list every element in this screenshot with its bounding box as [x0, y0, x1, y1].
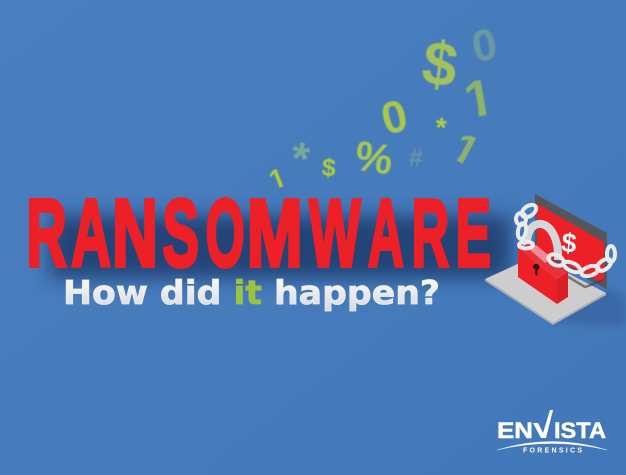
character: hash: # — [409, 144, 423, 172]
laptop screen bezel — [535, 194, 607, 289]
padlock top highlight — [528, 245, 552, 263]
chain shadow — [560, 272, 604, 287]
subtitle: How did it happen? — [63, 273, 440, 312]
laptop shadow — [545, 289, 626, 326]
title: A — [71, 179, 111, 287]
title: M — [247, 179, 303, 287]
title: O — [206, 181, 245, 287]
padlock shackle — [527, 224, 558, 260]
character: mid zero: 0 — [376, 89, 413, 145]
title: S — [162, 179, 199, 287]
chains — [516, 202, 615, 278]
title: W — [309, 179, 361, 287]
logo check mark — [533, 410, 553, 438]
logo wordmark left: EN — [497, 418, 533, 443]
character: small one: 1 — [265, 162, 290, 195]
character: slanted one: 1 — [444, 123, 487, 175]
title: E — [456, 180, 491, 287]
title: R — [412, 180, 449, 287]
padlock side — [557, 272, 568, 304]
character: percent: % — [352, 132, 396, 184]
title: A — [368, 181, 404, 287]
title: R — [26, 179, 67, 287]
icon: locked laptop — [485, 194, 626, 326]
keyhole — [533, 264, 539, 276]
character: top zero: 0 — [468, 19, 501, 72]
logo arc — [497, 442, 607, 450]
screen dollar sign: $ — [560, 227, 578, 259]
logo wordmark right: ISTA — [554, 418, 606, 443]
character: big dollar: $ — [418, 28, 462, 101]
logo: Envista Forensics — [497, 410, 607, 454]
character: small dollar: $ — [321, 153, 337, 183]
flying characters — [269, 29, 496, 188]
laptop base edge — [485, 279, 606, 325]
padlock front — [518, 248, 557, 304]
character: big one: 1 — [460, 68, 498, 130]
logo tagline: FORENSICS — [523, 448, 582, 454]
laptop screen — [537, 204, 604, 283]
character: small asterisk: * — [434, 112, 448, 143]
character: large asterisk: * — [288, 131, 313, 185]
laptop base — [485, 256, 606, 323]
title shadow — [50, 216, 510, 278]
title: N — [112, 180, 158, 287]
title — [26, 179, 491, 287]
padlock top — [518, 243, 568, 279]
